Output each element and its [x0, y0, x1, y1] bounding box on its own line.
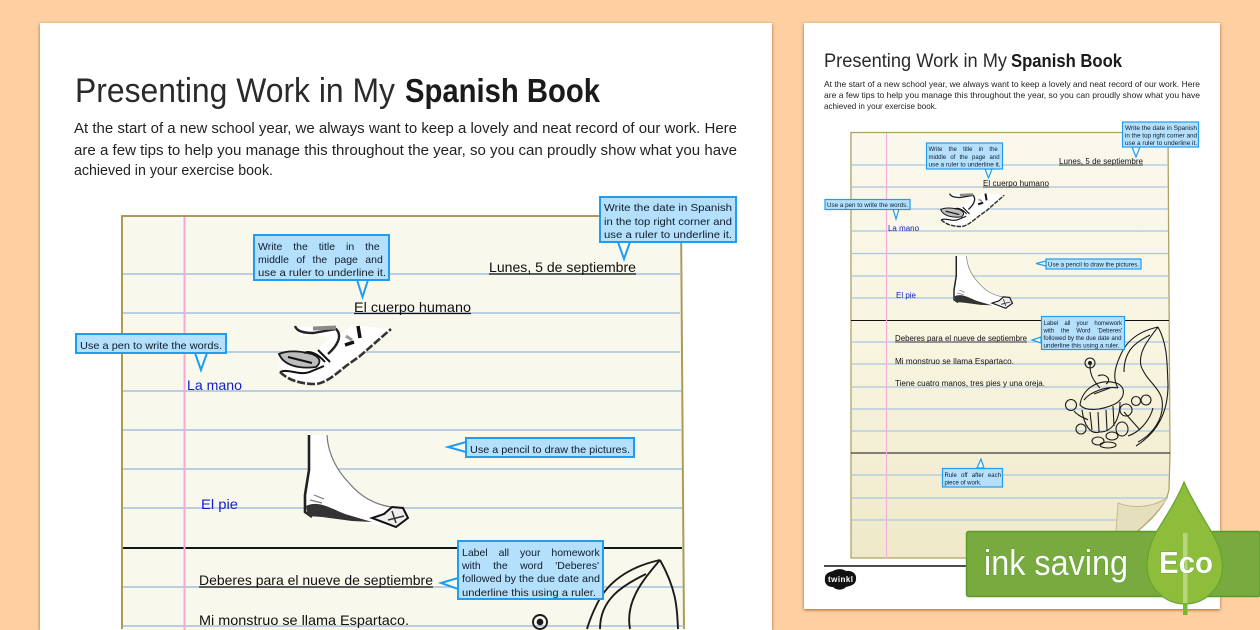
small intro text	[824, 79, 1200, 111]
small title: Presenting Work in My	[824, 51, 1007, 72]
intro text: At the start of a new school year, we always want to keep a lovely and neat record of our work. Here	[74, 120, 737, 137]
handwriting: homework heading: Deberes para el nueve de septiembre	[199, 572, 433, 588]
small callout: homework label: with the Word 'Deberes'	[1042, 328, 1122, 334]
callout: date: Write the date in Spanish	[604, 202, 732, 214]
small intro text: achieved in your exercise book.	[824, 101, 937, 111]
small callout: title: Write the title in the	[928, 147, 998, 153]
small callout: date: use a ruler to underline it.	[1125, 141, 1197, 147]
banner	[966, 532, 1260, 596]
small callout: pen: Use a pen to write the words.	[827, 203, 908, 209]
title: Presenting Work in My	[75, 72, 395, 110]
leaf	[1147, 482, 1222, 604]
twinkl logo: twinkl	[828, 575, 853, 584]
small callout: title: use a ruler to underline it.	[928, 162, 1001, 168]
small callout: rule off	[942, 459, 1002, 487]
eco badge: ink saving	[966, 482, 1260, 615]
small illustration: monster	[1066, 327, 1168, 448]
callout: homework label	[441, 541, 603, 599]
handwriting: date: Lunes, 5 de septiembre	[489, 259, 636, 275]
callout: homework label: Label all your homework	[462, 547, 601, 559]
leaf stem	[1183, 533, 1188, 615]
illustration: foot	[305, 435, 408, 527]
small intro text: At the start of a new school year, we always want to keep a lovely and neat record of our work. Here	[824, 79, 1200, 89]
small callout: pencil	[1036, 259, 1141, 269]
notebook paper	[122, 216, 684, 630]
footer rule	[824, 565, 966, 567]
callout: homework label: underline this using a ruler.	[462, 587, 596, 599]
intro text: achieved in your exercise book.	[74, 162, 273, 179]
ink saving label: ink saving	[984, 542, 1128, 583]
callout: title: use a ruler to underline it.	[258, 267, 386, 279]
small callout: pencil: Use a pencil to draw the pictures.	[1048, 262, 1139, 268]
small notebook paper	[851, 132, 1170, 558]
callout: pen	[76, 334, 226, 370]
intro text: are a few tips to help you manage this throughout the year, so you can proudly show what you have	[74, 142, 737, 159]
intro text	[74, 120, 737, 179]
callout: homework label: followed by the due date and	[462, 573, 600, 585]
small illustration: hand	[941, 193, 1004, 227]
small title	[824, 50, 1123, 72]
callout: title: middle of the page and	[258, 254, 383, 266]
callout: pencil	[448, 438, 634, 457]
small callout: title	[926, 143, 1002, 178]
handwriting: La mano: La mano	[187, 377, 242, 393]
handwriting: monster sentence: Mi monstruo se llama Espartaco.	[199, 612, 409, 628]
Eco label: Eco	[1159, 545, 1213, 580]
small callout: rule off: piece of work.	[944, 480, 982, 486]
illustration: hand	[279, 325, 391, 384]
small callout: date: in the top right corner and	[1125, 134, 1197, 140]
small handwriting: date: Lunes, 5 de septiembre	[1059, 157, 1144, 166]
illustration: monster	[533, 560, 678, 629]
title	[75, 72, 601, 110]
callout: date	[600, 197, 736, 259]
small callout: date: Write the date in Spanish	[1125, 126, 1197, 132]
callout: date: use a ruler to underline it.	[604, 229, 732, 241]
callout: pencil: Use a pencil to draw the pictures.	[470, 444, 630, 456]
small intro text: are a few tips to help you manage this throughout the year, so you can proudly show what you have	[824, 90, 1200, 100]
small callout: rule off: Rule off after each	[944, 473, 1001, 479]
small handwriting: description sentence: Tiene cuatro manos, tres pies y una oreja.	[895, 379, 1045, 388]
small handwriting: title: El cuerpo humano	[983, 179, 1050, 188]
twinkl logo	[825, 569, 856, 590]
small handwriting: La mano: La mano	[888, 224, 920, 233]
small callout: homework label: Label all your homework	[1044, 321, 1123, 327]
callout: date: in the top right corner and	[604, 216, 732, 228]
small callout: pen	[825, 200, 910, 219]
panel: large worksheet page	[40, 23, 772, 630]
small handwriting: monster sentence: Mi monstruo se llama Espartaco.	[895, 357, 1014, 366]
small handwriting: homework heading: Deberes para el nueve de septiembre	[895, 334, 1028, 343]
small illustration: foot	[954, 256, 1013, 308]
panel: small full worksheet page	[804, 23, 1220, 609]
callout: pen: Use a pen to write the words.	[80, 340, 222, 352]
small callout: homework label: underline this using a ruler.	[1044, 344, 1120, 350]
small callout: homework label	[1032, 316, 1124, 350]
callout: title: Write the title in the	[258, 241, 380, 253]
small handwriting: El pie: El pie	[896, 291, 917, 300]
small callout: date	[1122, 122, 1198, 157]
title: Spanish Book	[405, 72, 601, 109]
small callout: title: middle of the page and	[928, 155, 1000, 161]
callout: homework label: with the word 'Deberes'	[461, 560, 599, 572]
callout: title	[254, 235, 389, 297]
small callout: homework label: followed by the due date and	[1044, 336, 1122, 342]
handwriting: title: El cuerpo humano	[354, 299, 471, 315]
small title: Spanish Book	[1011, 50, 1123, 71]
handwriting: El pie: El pie	[201, 496, 238, 512]
